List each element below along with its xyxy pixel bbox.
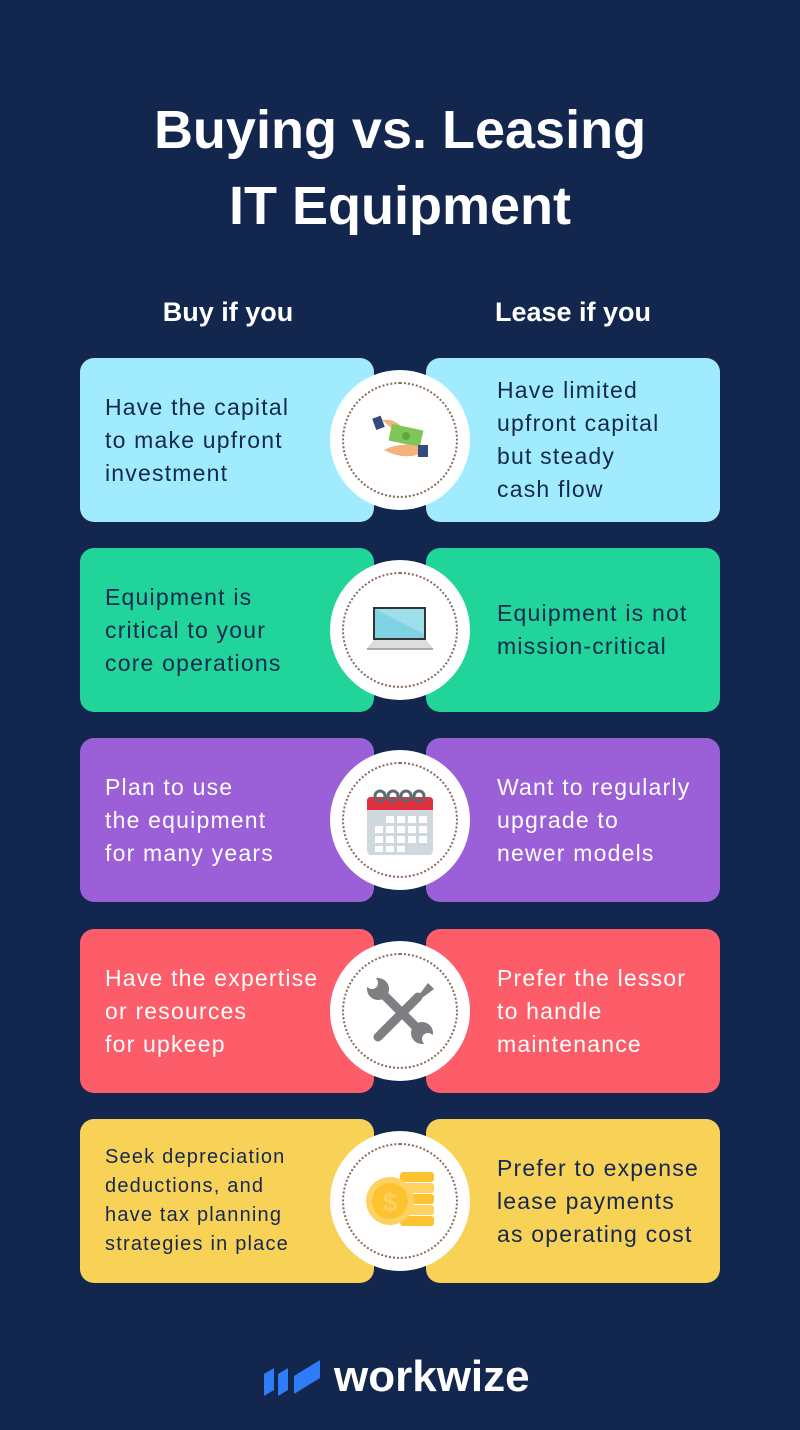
row 1 lease card: Have limited: [497, 377, 638, 403]
row 3 buy card: the equipment: [105, 806, 266, 832]
icon: coins: [330, 1131, 470, 1271]
row 3 buy card: for many years: [105, 840, 274, 866]
row 4 buy card: for upkeep: [105, 1030, 226, 1056]
row 1 lease card: but steady: [497, 443, 615, 469]
row 2 buy card: Equipment is: [105, 584, 252, 610]
title: [154, 100, 646, 236]
row 3 buy card: [80, 738, 374, 902]
row 3 lease card: upgrade to: [497, 806, 619, 832]
row 5 buy card: deductions, and: [105, 1175, 264, 1197]
row 2 lease card: [426, 548, 720, 712]
row 5 buy card: have tax planning: [105, 1204, 282, 1226]
row 4 buy card: or resources: [105, 998, 247, 1024]
row 4 lease card: Prefer the lessor: [497, 964, 686, 990]
row 1 buy card: investment: [105, 460, 228, 486]
row 4 lease card: maintenance: [497, 1030, 642, 1056]
row 1 lease card: upfront capital: [497, 410, 659, 436]
logo: [264, 1352, 530, 1401]
row 1 buy card: [80, 358, 374, 522]
icon: tools: [330, 941, 470, 1081]
row 5 buy card: [80, 1119, 374, 1283]
row 5 buy card: Seek depreciation: [105, 1146, 286, 1168]
row 2 lease card: Equipment is not: [497, 600, 688, 626]
row 3 buy card: Plan to use: [105, 774, 233, 800]
icon: money hands: [330, 370, 470, 510]
row 5 lease card: lease payments: [497, 1188, 675, 1214]
row 4 lease card: [426, 929, 720, 1093]
row 3 lease card: Want to regularly: [497, 774, 690, 800]
icon: logo mark: [264, 1360, 320, 1396]
row 1 buy card: to make upfront: [105, 426, 283, 452]
title: Buying vs. Leasing: [154, 100, 646, 160]
row 3 lease card: newer models: [497, 840, 655, 866]
icon: calendar: [330, 750, 470, 890]
row 4 buy card: Have the expertise: [105, 964, 318, 990]
row 2 buy card: critical to your: [105, 616, 266, 642]
logo text: workwize: [334, 1352, 530, 1401]
row 5 lease card: [426, 1119, 720, 1283]
title: IT Equipment: [229, 176, 571, 236]
row 1 lease card: cash flow: [497, 476, 604, 502]
row 4 buy card: [80, 929, 374, 1093]
icon: coins: $: [383, 1187, 398, 1217]
row 2 buy card: core operations: [105, 650, 282, 676]
row 5 lease card: Prefer to expense: [497, 1154, 699, 1180]
heading: lease: Lease if you: [495, 297, 651, 327]
icon: laptop: [330, 560, 470, 700]
row 3 lease card: [426, 738, 720, 902]
row 2 lease card: mission-critical: [497, 633, 667, 659]
row 4 lease card: to handle: [497, 998, 602, 1024]
row 5 lease card: as operating cost: [497, 1220, 693, 1246]
row 1 lease card: [426, 358, 720, 522]
heading: buy: Buy if you: [163, 297, 293, 327]
row 5 buy card: strategies in place: [105, 1233, 289, 1255]
row 1 buy card: Have the capital: [105, 394, 289, 420]
row 2 buy card: [80, 548, 374, 712]
